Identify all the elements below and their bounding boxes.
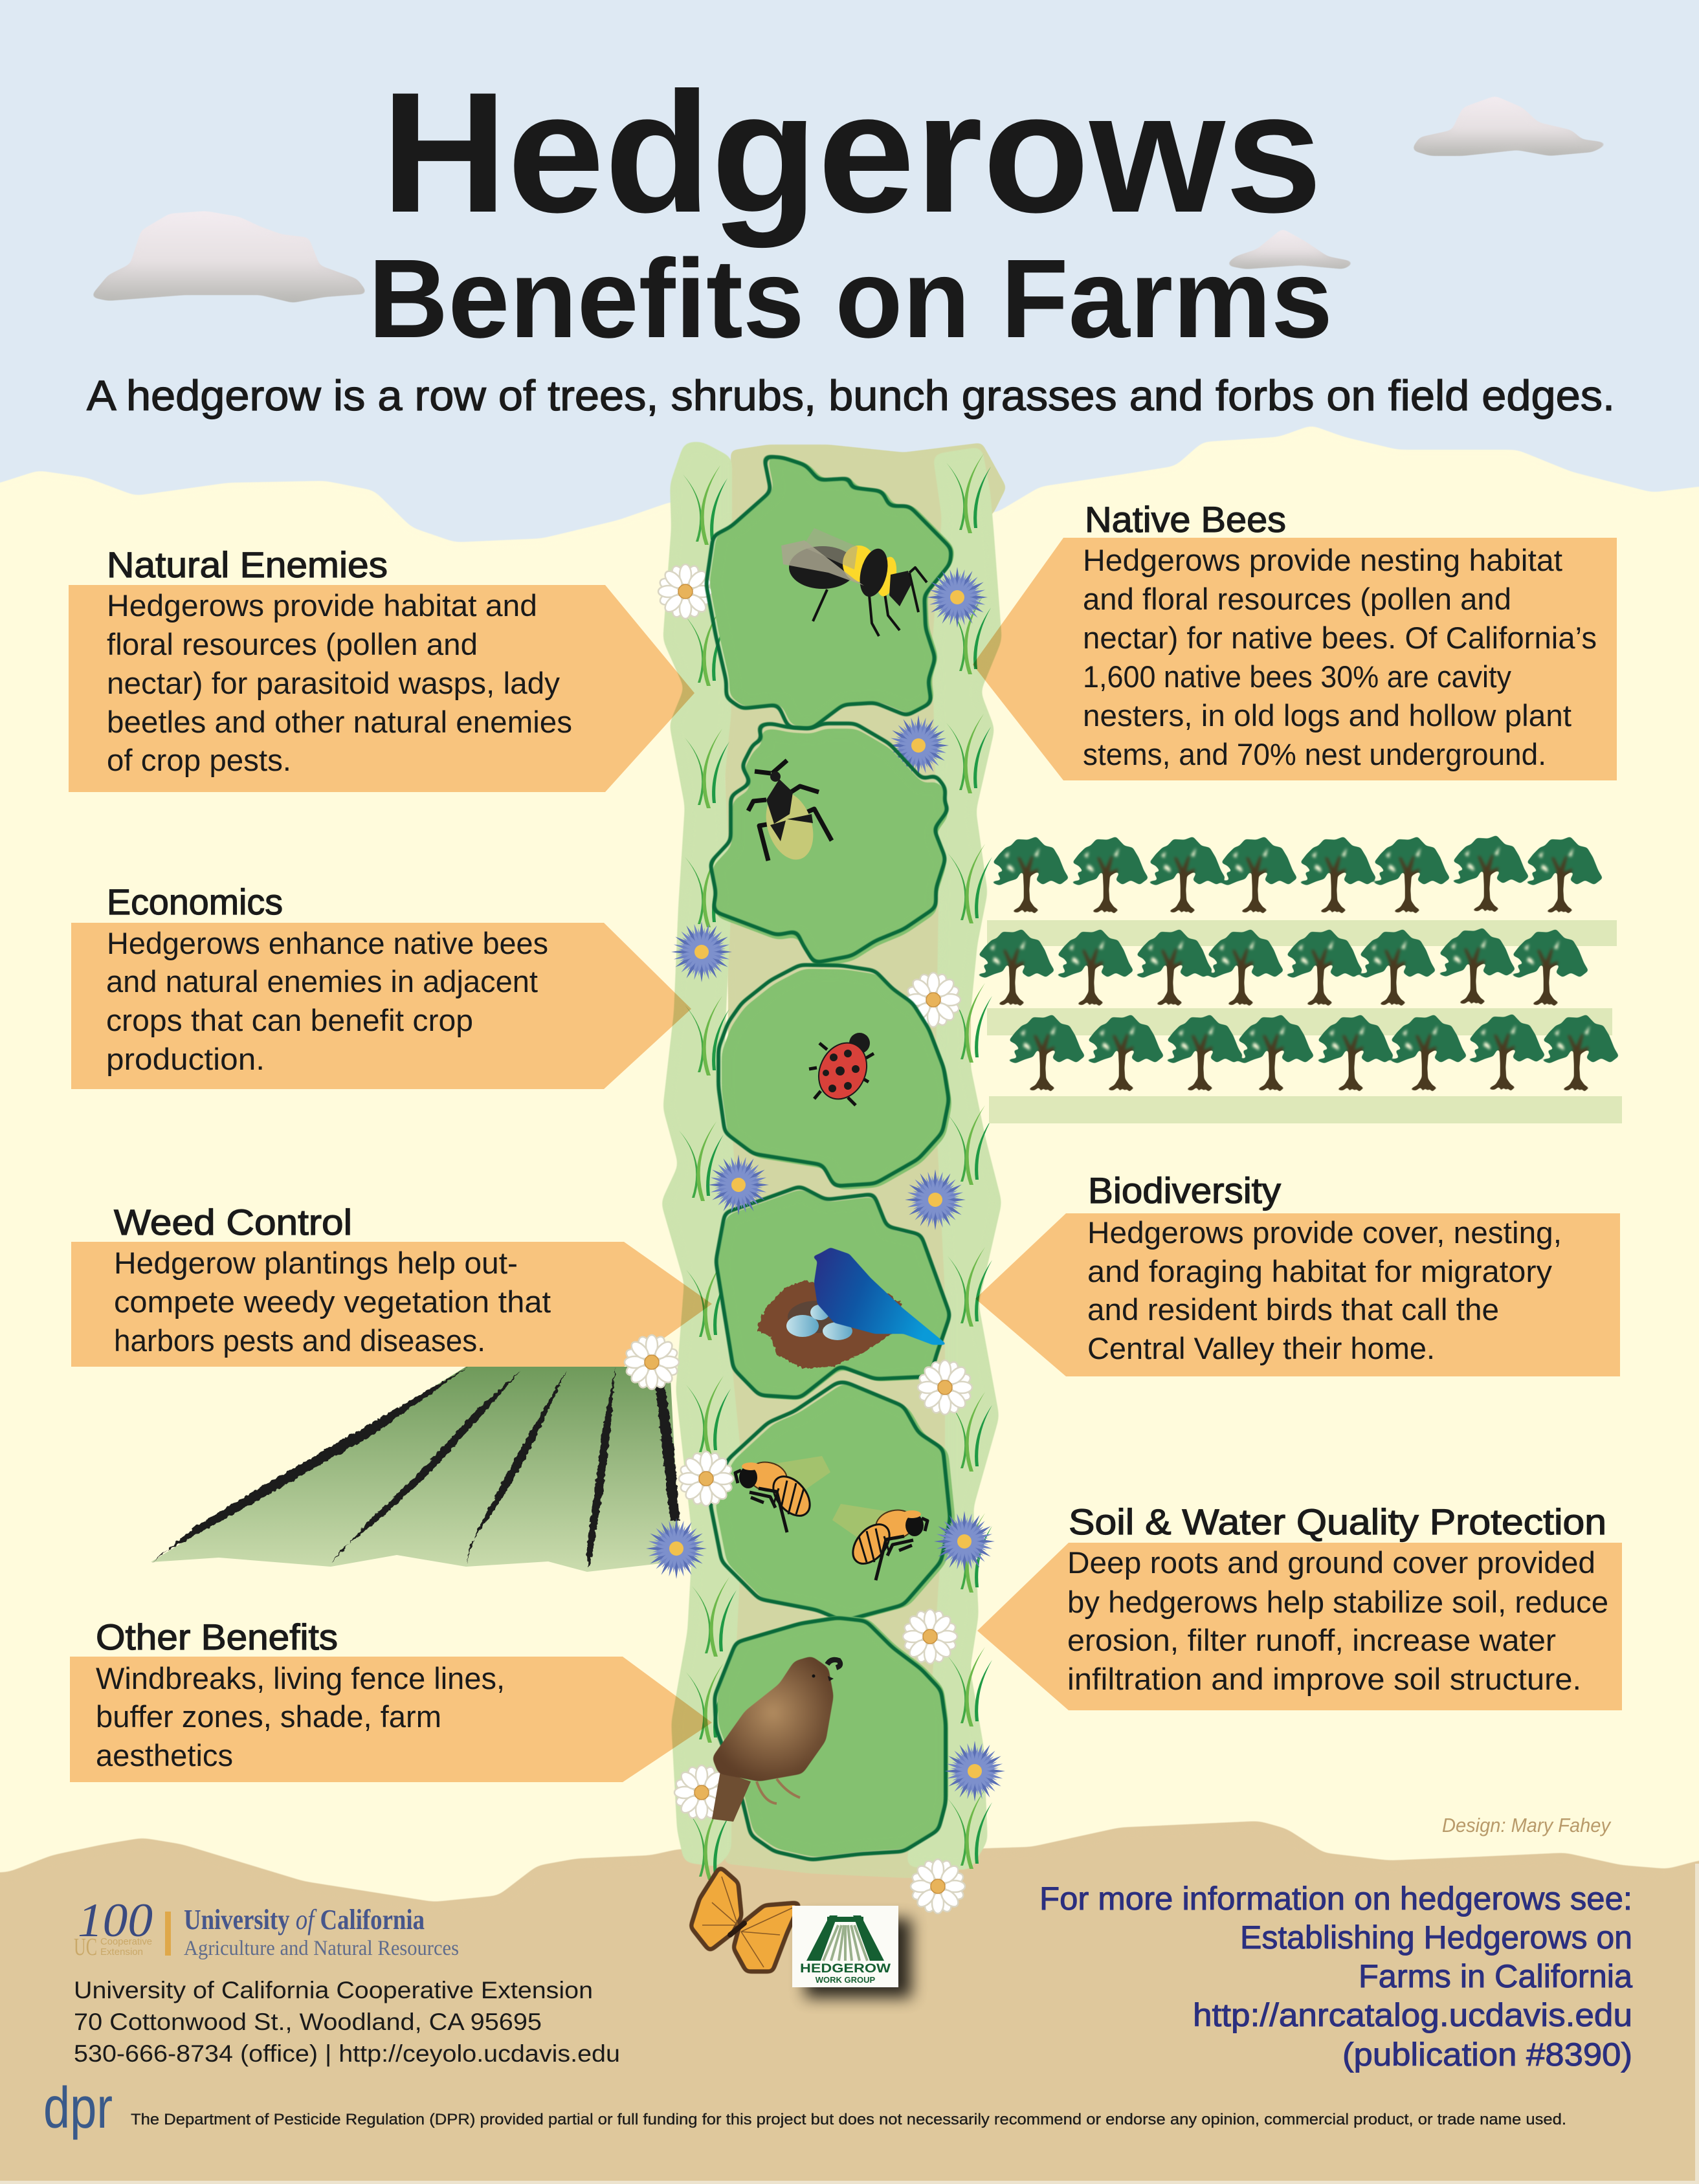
- address block: 70 Cottonwood St., Woodland, CA 95695: [74, 2009, 542, 2035]
- centennial mark: 100: [78, 1894, 153, 1947]
- panel: biodiversity: [975, 1170, 1620, 1376]
- body text: [1087, 1215, 1562, 1365]
- UC mark: UC: [74, 1934, 97, 1961]
- icon: quail: [712, 1656, 840, 1822]
- address block: 530-666-8734 (office) | http://ceyolo.ucdavis.edu: [74, 2040, 620, 2067]
- panel: economics: [71, 881, 691, 1089]
- heading: Native Bees: [1085, 499, 1286, 540]
- disclaimer: The Department of Pesticide Regulation (DPR) provided partial or full funding for this project but does not necessarily recommend or endorse any opinion, commercial product, or trade name used.: [131, 2111, 1566, 2128]
- body text: [96, 1661, 505, 1772]
- field with furrows: [151, 1367, 680, 1572]
- body text: erosion, filter runoff, increase water: [1067, 1623, 1556, 1657]
- icon: bumble bee: [781, 528, 927, 636]
- body text: Hedgerows enhance native bees: [107, 926, 548, 960]
- body text: and resident birds that call the: [1087, 1292, 1499, 1327]
- panel: native bees: [973, 499, 1617, 780]
- body text: [107, 588, 572, 777]
- arrow box: [71, 1242, 712, 1367]
- heading: Natural Enemies: [107, 544, 388, 585]
- tree row 2: [976, 928, 1588, 1008]
- icon: butterfly: [693, 1870, 797, 1969]
- blob 2 fill and outline: [710, 723, 950, 968]
- body text: crops that can benefit crop: [106, 1003, 473, 1037]
- heading: Weed Control: [114, 1202, 352, 1242]
- logo shadow: [805, 1919, 911, 1998]
- icon: soldier beetle: [748, 760, 832, 866]
- arrow box: [71, 923, 691, 1089]
- logo mark: [806, 1915, 884, 1961]
- tan ground: [0, 1821, 1699, 2184]
- blob 5 fill and outline: [710, 1382, 955, 1622]
- address block: [74, 1977, 620, 2067]
- gold divider: [165, 1912, 171, 1956]
- body text: [1067, 1545, 1608, 1696]
- body text: 1,600 native bees 30% are cavity: [1083, 659, 1511, 694]
- body text: nectar) for parasitoid wasps, lady: [107, 666, 560, 700]
- more information block: For more information on hedgerows see:: [1039, 1881, 1632, 1917]
- body text: beetles and other natural enemies: [107, 705, 572, 739]
- hedge plant blobs: [706, 455, 955, 1860]
- panel: soil and water: [977, 1501, 1622, 1710]
- cloud: left: [90, 211, 368, 303]
- body text: and foraging habitat for migratory: [1087, 1254, 1553, 1288]
- cloud: middle: [1225, 228, 1357, 269]
- logo card: [792, 1906, 898, 1987]
- address block: University of California Cooperative Extension: [74, 1977, 593, 2003]
- heading: Economics: [107, 881, 283, 922]
- extension: Extension: [100, 1947, 143, 1958]
- crop rows with trees: [976, 835, 1622, 1123]
- division name: Agriculture and Natural Resources: [184, 1937, 459, 1960]
- body text: [114, 1246, 551, 1358]
- body text: Hedgerows provide habitat and: [107, 588, 537, 623]
- blob 4 fill and outline: [716, 1186, 951, 1400]
- panel: weed control: [71, 1202, 712, 1367]
- body text: nesters, in old logs and hollow plant: [1083, 698, 1571, 733]
- panel: other benefits: [70, 1616, 712, 1782]
- field ground: [151, 1367, 680, 1572]
- more information block: (publication #8390): [1342, 2036, 1632, 2073]
- body text: nectar) for native bees. Of California’s: [1083, 621, 1597, 655]
- tree row 1: [990, 835, 1603, 915]
- icon: honey bee left: [735, 1456, 830, 1532]
- furrows: [151, 1367, 680, 1569]
- more information block: http://anrcatalog.ucdavis.edu: [1193, 1997, 1632, 2033]
- logo text: HEDGEROW: [800, 1962, 891, 1976]
- hedgerow strip: [661, 441, 1006, 1880]
- definition line: A hedgerow is a row of trees, shrubs, bunch grasses and forbs on field edges.: [87, 371, 1615, 419]
- more information block: Establishing Hedgerows on: [1240, 1919, 1632, 1956]
- blob 3 fill and outline: [718, 965, 952, 1190]
- blob 6 fill and outline: [715, 1615, 948, 1860]
- ground edge strip: [0, 1864, 1699, 2184]
- body text: Hedgerows provide cover, nesting,: [1087, 1215, 1562, 1250]
- body text: aesthetics: [96, 1738, 233, 1772]
- grass tufts: [679, 454, 992, 1880]
- DPR logo: dpr: [43, 2076, 113, 2141]
- UC logo: [74, 1894, 459, 1961]
- body text: harbors pests and diseases.: [114, 1323, 485, 1358]
- cloud: right: [1411, 96, 1610, 156]
- arrow box: [977, 1543, 1622, 1710]
- main title: Hedgerows: [381, 57, 1322, 249]
- logo subtext: WORK GROUP: [816, 1975, 876, 1985]
- body text: compete weedy vegetation that: [114, 1285, 551, 1319]
- tree row 3: [1006, 1014, 1619, 1093]
- body text: of crop pests.: [107, 743, 291, 777]
- arrow box: [975, 1213, 1620, 1376]
- arrow box: [973, 538, 1617, 780]
- body text: Central Valley their home.: [1087, 1331, 1435, 1365]
- panel: natural enemies: [69, 544, 694, 792]
- design credit: Design: Mary Fahey: [1442, 1814, 1612, 1837]
- heading: Biodiversity: [1088, 1170, 1281, 1211]
- heading: Other Benefits: [96, 1616, 338, 1657]
- beige hedge centre: [725, 443, 1006, 1878]
- cooperative: Cooperative: [100, 1936, 152, 1947]
- body text: production.: [106, 1042, 265, 1076]
- body text: floral resources (pollen and: [107, 627, 478, 661]
- arrow box: [69, 585, 694, 792]
- body text: by hedgerows help stabilize soil, reduce: [1067, 1585, 1608, 1619]
- body text: Windbreaks, living fence lines,: [96, 1661, 505, 1695]
- cream field hills: [0, 425, 1699, 1941]
- heading: Soil & Water Quality Protection: [1069, 1501, 1606, 1542]
- icon: bird on nest: [757, 1248, 947, 1369]
- arrow box: [70, 1657, 712, 1782]
- body text: stems, and 70% nest underground.: [1083, 737, 1546, 771]
- body text: and floral resources (pollen and: [1083, 582, 1511, 616]
- logo: hedgerow work group: [792, 1906, 911, 1998]
- flowers in front: [614, 556, 1016, 1925]
- left hedge column: [661, 441, 744, 1867]
- subtitle heading: Benefits on Farms: [368, 236, 1333, 361]
- icon: honey bee right: [832, 1504, 927, 1580]
- right hedge column: [906, 447, 1002, 1870]
- university name: University of California: [184, 1904, 425, 1936]
- body text: Hedgerow plantings help out-: [114, 1246, 518, 1280]
- title: [87, 57, 1615, 419]
- body text: [106, 926, 548, 1076]
- body text: Deep roots and ground cover provided: [1067, 1545, 1595, 1580]
- blob 1 fill and outline: [706, 455, 955, 729]
- more information block: [1039, 1881, 1632, 2073]
- body text: buffer zones, shade, farm: [96, 1699, 441, 1734]
- body text: infiltration and improve soil structure.: [1067, 1662, 1581, 1696]
- icon: ladybug: [809, 1033, 876, 1107]
- body text: Hedgerows provide nesting habitat: [1083, 543, 1562, 577]
- more information block: Farms in California: [1359, 1958, 1632, 1994]
- flowers behind blobs: [647, 553, 972, 1038]
- crop bands: [987, 920, 1622, 1123]
- body text: [1083, 543, 1597, 771]
- body text: and natural enemies in adjacent: [106, 964, 538, 998]
